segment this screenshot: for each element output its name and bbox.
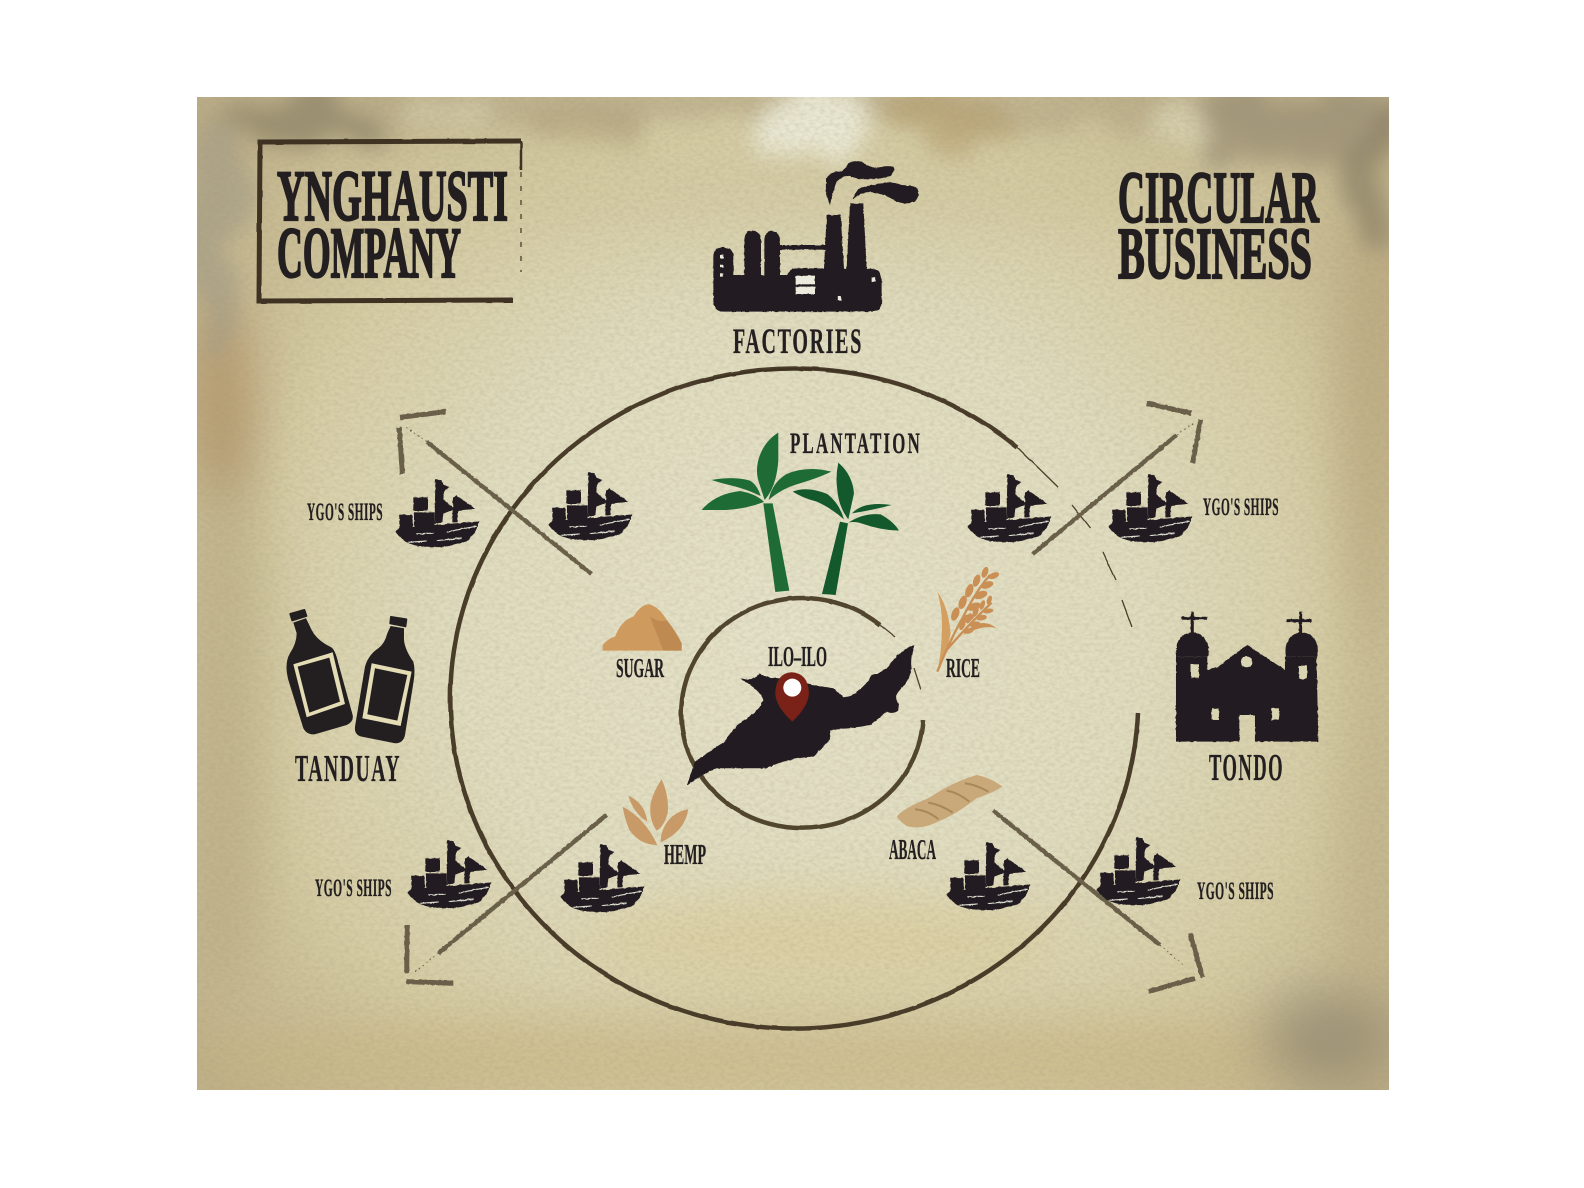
icon: palm trees [702, 433, 899, 595]
text: YGO'S SHIPS [1203, 494, 1279, 521]
text: YGO'S SHIPS [1197, 878, 1274, 905]
right bottle [355, 617, 414, 743]
text: ABACA [889, 835, 936, 866]
panel: title box Ynghausti Company: COMPANY [277, 213, 461, 293]
icon: location pin [775, 672, 809, 722]
label: plantation: PLANTATION [790, 427, 922, 460]
title: Ynghausti: YNGHAUSTI [277, 156, 508, 236]
icon: factory [713, 161, 919, 312]
title: Circular Business: BUSINESS [1118, 213, 1312, 294]
label: rice: RICE [946, 653, 980, 683]
panel: title box Ynghausti Company [259, 141, 521, 301]
label: Tanduay: TANDUAY [295, 748, 401, 790]
text: YGO'S SHIPS [315, 875, 392, 902]
icon: Tanduay bottles [287, 610, 414, 743]
icon: ship bottom right outer [1096, 838, 1180, 905]
icon: ship bottom left outer [407, 841, 491, 908]
panel: aged paper background [180, 80, 1420, 1110]
label: hemp: HEMP [664, 840, 706, 871]
text: ILO–ILO [768, 641, 827, 673]
arrow: bottom left [406, 815, 607, 983]
title: Circular Business: CIRCULAR [1118, 157, 1320, 238]
outer circular route [450, 369, 1138, 1029]
icon: abaca rope [897, 775, 1003, 827]
inner circle around Ilo-Ilo [681, 598, 923, 828]
arrow: top left [399, 412, 592, 574]
title frame [259, 141, 521, 301]
label: factories: FACTORIES [733, 321, 863, 361]
icon: ship top right outer [1108, 475, 1192, 542]
icon: ship top left inner [548, 473, 632, 540]
icon: Ilo-Ilo island [687, 645, 914, 786]
arrow: bottom right [993, 811, 1203, 992]
arrow: top right [1033, 403, 1201, 554]
icon: hemp [623, 779, 688, 845]
left bottle [287, 610, 353, 734]
icon: Tondo church [1176, 612, 1318, 742]
text: TONDO [1209, 747, 1284, 789]
title: Circular Business [1118, 157, 1320, 294]
text: YGO'S SHIPS [307, 499, 383, 526]
icon: ship bottom left inner [560, 845, 644, 912]
label: sugar: SUGAR [616, 653, 664, 683]
icon: ship top left outer [395, 480, 479, 547]
icon: sugar pile [603, 604, 682, 651]
icon: ship bottom right inner [946, 843, 1030, 910]
icon: ship top right inner [967, 475, 1051, 542]
icon: rice [937, 566, 1000, 672]
